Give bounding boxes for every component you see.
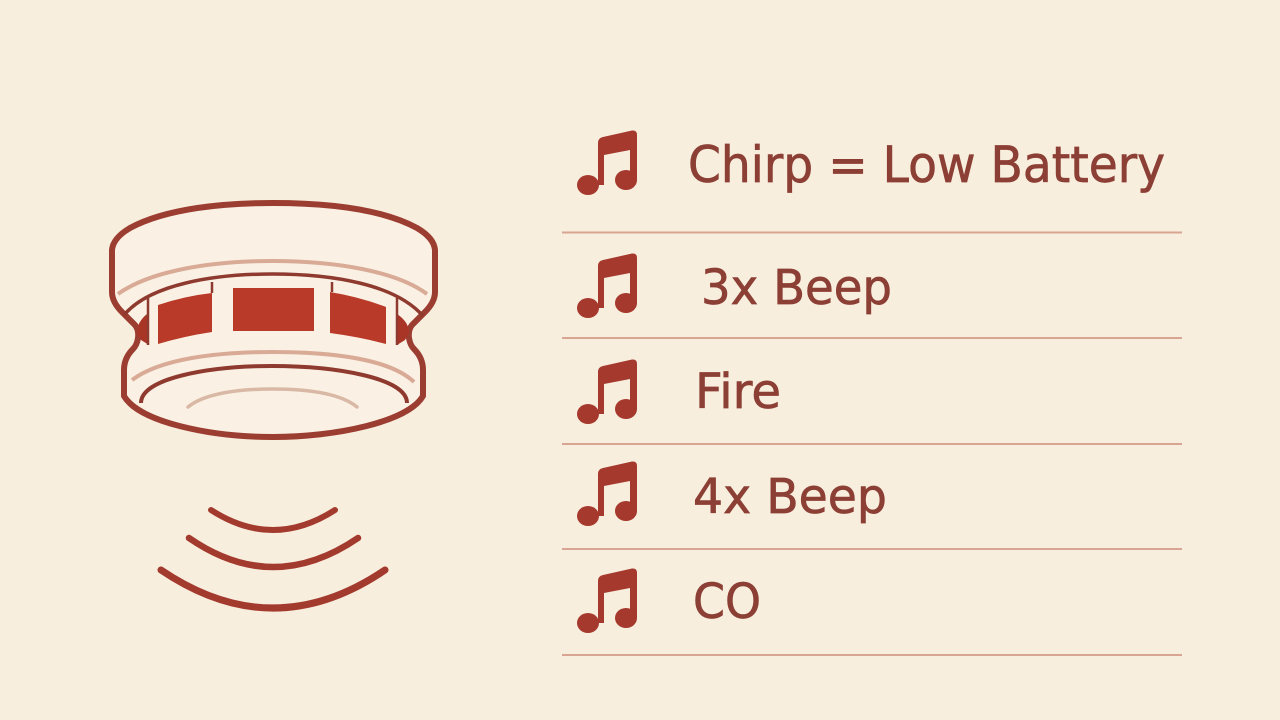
vent window right: [330, 292, 386, 344]
centre lens arc: [188, 389, 357, 407]
label: 3x Beep: [701, 260, 892, 316]
label: 4x Beep: [693, 469, 887, 525]
row: low battery: [577, 130, 1165, 195]
large wave: [161, 570, 385, 608]
icon: music note: [577, 253, 637, 318]
upper band line: [118, 261, 427, 294]
vent window centre: [233, 288, 314, 331]
row: fire: [577, 359, 781, 424]
icon: music note: [577, 359, 637, 424]
lower band line: [132, 352, 414, 382]
small wave: [211, 510, 335, 530]
row: CO: [577, 568, 761, 633]
icon: sound waves: [161, 510, 385, 608]
label: Fire: [695, 364, 781, 420]
right side shadow: [397, 314, 409, 345]
vent window left: [158, 293, 212, 344]
detector body outline: [112, 203, 435, 437]
label: CO: [693, 574, 761, 630]
label: Chirp = Low Battery: [688, 136, 1165, 194]
medium wave: [189, 538, 358, 567]
vent post right: [332, 282, 397, 345]
icon: music note: [577, 130, 637, 195]
icon: music note: [577, 568, 637, 633]
icon: music note: [577, 461, 637, 526]
row: 3x beep: [577, 253, 892, 318]
left side shadow: [137, 314, 149, 345]
inner rim line: [141, 366, 407, 403]
collar line: [124, 274, 423, 316]
icon: smoke detector: [112, 203, 435, 437]
row: 4x beep: [577, 461, 887, 526]
vent post left: [148, 282, 212, 345]
